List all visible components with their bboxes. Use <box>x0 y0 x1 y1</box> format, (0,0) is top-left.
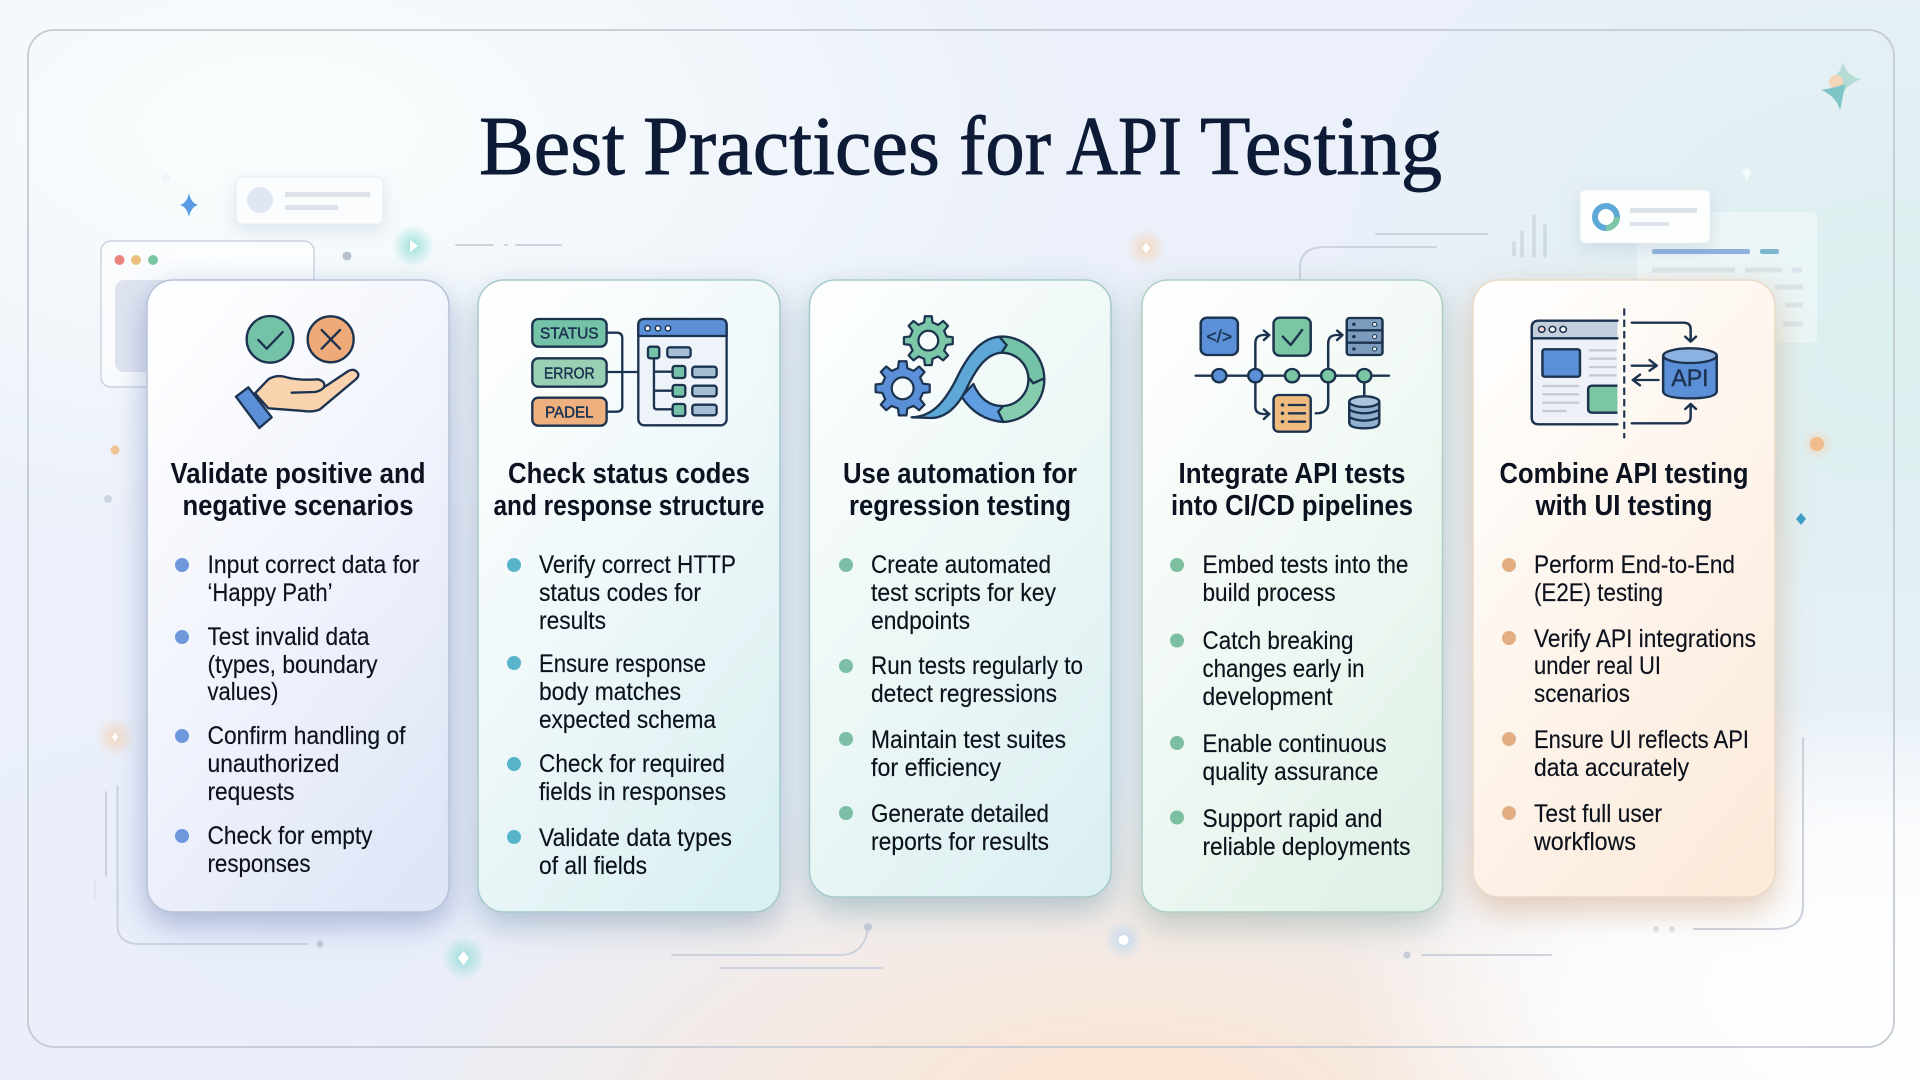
icon: gears and automation loop <box>876 316 1044 422</box>
bullet list: unauthorized <box>208 750 340 778</box>
bullet list: changes early in <box>1202 655 1364 683</box>
title: API <box>1066 100 1182 193</box>
bullet list: build process <box>1202 579 1336 607</box>
bullet list: of all fields <box>539 852 647 880</box>
icon: status labels and response tree: ERROR <box>544 365 595 382</box>
bullet list: (types, boundary <box>208 651 378 679</box>
bullet list: Ensure UI reflects API <box>1534 726 1749 754</box>
icon: UI window and API cylinder: API <box>1671 365 1709 392</box>
bullet list: Embed tests into the <box>1202 551 1408 579</box>
bullet list: Verify correct HTTP <box>539 551 736 579</box>
heading <box>494 458 764 522</box>
front donut card <box>1580 190 1710 243</box>
icon: CI/CD pipeline: </> <box>1206 326 1232 346</box>
bullet list: Ensure response <box>539 650 706 678</box>
bullet list: Input correct data for <box>208 551 420 579</box>
heading: Validate positive and <box>170 458 426 490</box>
bullet list: (E2E) testing <box>1534 579 1663 607</box>
bullet list: scenarios <box>1534 680 1630 708</box>
card background <box>147 280 449 912</box>
icon: status labels and response tree <box>532 319 727 426</box>
icon: UI window and API cylinder <box>1532 308 1717 438</box>
bullet list: reliable deployments <box>1202 833 1410 861</box>
peach glow left <box>95 717 135 757</box>
panel: integrate API tests into CI/CD pipelines <box>1142 280 1442 912</box>
bullet list: Verify API integrations <box>1534 625 1756 653</box>
bullet list: expected schema <box>539 706 716 734</box>
heading <box>1171 458 1413 522</box>
bullet list: reports for results <box>871 828 1049 856</box>
bullet list: ‘Happy Path’ <box>208 579 332 607</box>
heading <box>170 458 426 522</box>
bullet list: Support rapid and <box>1202 805 1382 833</box>
bullet list: Create automated <box>871 551 1051 579</box>
heading: Check status codes <box>508 458 750 490</box>
bullet list: responses <box>208 850 310 878</box>
decorative background elements: upper left <box>101 174 561 503</box>
bullet list: quality assurance <box>1202 758 1378 786</box>
bullet list <box>175 551 420 878</box>
bullet list <box>1170 551 1410 861</box>
card background <box>1142 280 1442 912</box>
bullet list: Check for required <box>539 750 725 778</box>
bullet list: development <box>1202 683 1333 711</box>
bullet list: Maintain test suites <box>871 726 1066 754</box>
panel: use automation for regression testing <box>810 280 1111 897</box>
bullet list: Check for empty <box>208 822 373 850</box>
floating profile card <box>236 177 383 224</box>
card background <box>478 280 780 912</box>
panel: check status codes and response structure <box>478 280 780 912</box>
heading: Combine API testing <box>1500 458 1748 490</box>
bullet list: Test invalid data <box>208 623 370 651</box>
bullet list: Test full user <box>1534 800 1662 828</box>
teal glow diamond <box>442 936 486 980</box>
icon: CI/CD pipeline <box>1196 318 1389 432</box>
panel: validate positive and negative scenarios <box>147 280 449 912</box>
glowing play marker <box>392 225 434 267</box>
bullet list: under real UI <box>1534 652 1661 680</box>
blue glow dot <box>1104 920 1144 960</box>
heading: Use automation for <box>843 458 1077 490</box>
heading: regression testing <box>849 490 1071 522</box>
mini bar chart <box>1514 216 1545 256</box>
bullet list: fields in responses <box>539 778 726 806</box>
heading: and response structure <box>494 490 764 522</box>
bullet list: Generate detailed <box>871 800 1049 828</box>
bullet list: for efficiency <box>871 754 1001 782</box>
bullet list <box>1502 551 1756 856</box>
bullet list: endpoints <box>871 607 970 635</box>
heading: negative scenarios <box>182 490 414 522</box>
bullet list: Confirm handling of <box>208 722 406 750</box>
bullet list: values) <box>208 678 278 706</box>
decorative background elements: upper right <box>1126 62 1861 525</box>
bullet list <box>839 551 1083 856</box>
card background <box>1473 280 1775 897</box>
bullet list: Run tests regularly to <box>871 652 1083 680</box>
title: Practices <box>643 100 940 193</box>
bullet list: test scripts for key <box>871 579 1056 607</box>
icon: corner sparkle <box>1821 62 1861 110</box>
title: Best <box>479 100 625 193</box>
browser window mockup <box>101 241 314 387</box>
bullet list: results <box>539 607 606 635</box>
decorative background elements: lower area <box>95 717 1803 980</box>
heading: into CI/CD pipelines <box>1171 490 1413 522</box>
heading <box>843 458 1077 522</box>
title: for <box>959 100 1051 193</box>
bullet list: detect regressions <box>871 680 1057 708</box>
bullet list: Perform End-to-End <box>1534 551 1735 579</box>
bullet list <box>507 551 736 880</box>
card background <box>810 280 1111 897</box>
icon: status labels and response tree: PADEL <box>545 405 594 422</box>
icon: blue sparkle <box>180 193 198 217</box>
back data card <box>1637 212 1817 343</box>
heading: Integrate API tests <box>1178 458 1406 490</box>
bullet list: body matches <box>539 678 681 706</box>
bullet list: status codes for <box>539 579 701 607</box>
icon: status labels and response tree: STATUS <box>540 326 599 343</box>
bullet list: data accurately <box>1534 754 1689 782</box>
panel: combine API testing with UI testing <box>1473 280 1775 897</box>
peach glow marker <box>1126 228 1166 268</box>
title: Testing <box>1200 100 1442 193</box>
bullet list: Catch breaking <box>1202 627 1354 655</box>
icon: hand with check and cross <box>236 316 358 428</box>
heading: with UI testing <box>1535 490 1712 522</box>
orange glow dot <box>1801 428 1833 460</box>
bullet list: workflows <box>1533 828 1636 856</box>
bullet list: requests <box>208 778 294 806</box>
bullet list: Enable continuous <box>1202 730 1386 758</box>
heading <box>1500 458 1748 522</box>
bullet list: Validate data types <box>539 824 732 852</box>
